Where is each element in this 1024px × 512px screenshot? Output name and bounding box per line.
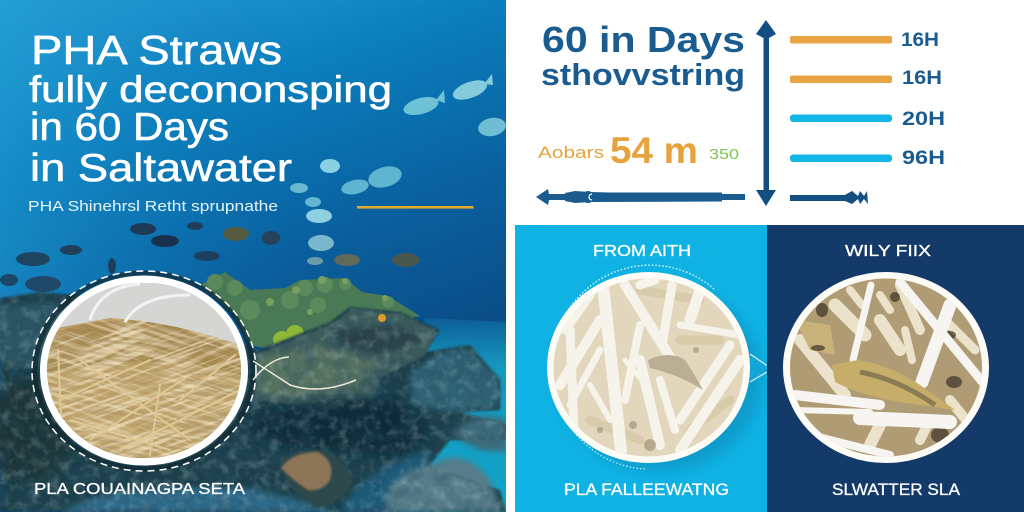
title: in Saltawater xyxy=(30,147,292,190)
title: PHA Straws xyxy=(31,27,282,73)
title: in 60 Days xyxy=(30,106,229,149)
stat row: 350 xyxy=(709,146,739,163)
straw photo xyxy=(550,276,746,460)
stat row xyxy=(538,130,739,171)
green coral xyxy=(200,272,420,350)
title: fully decononsping xyxy=(29,69,392,110)
heading: WILY FIIX xyxy=(845,243,932,260)
panel: PLA comparison xyxy=(515,225,772,512)
stat row: Aobars xyxy=(538,143,604,162)
seabed light water xyxy=(380,318,506,512)
bar values: 16H xyxy=(902,68,942,89)
bar values: 96H xyxy=(902,148,945,169)
label: SLWATTER SLA xyxy=(832,480,961,499)
accent line xyxy=(357,206,474,209)
fish school xyxy=(0,74,507,292)
dotted ring xyxy=(551,265,714,469)
bar values: 20H xyxy=(902,109,945,130)
orange coral xyxy=(378,314,386,322)
reef xyxy=(0,285,506,512)
right arrow xyxy=(790,191,868,204)
vertical double arrow xyxy=(756,20,776,206)
subtitle: PHA Shinehrsl Retht sprupnathe xyxy=(28,199,278,215)
stat row: 54 m xyxy=(610,130,698,171)
degraded straw photo xyxy=(786,276,986,460)
connector arrow xyxy=(750,354,772,382)
heading: FROM AITH xyxy=(593,243,691,260)
shadow xyxy=(559,285,761,471)
heading xyxy=(541,19,745,92)
panel: saltwater comparison xyxy=(767,225,1024,512)
label: PLA left: PLA COUAINAGPA SETA xyxy=(34,481,245,498)
bar values xyxy=(901,30,945,169)
heading: sthovvstring xyxy=(541,57,745,92)
callout: PLA straw circle xyxy=(31,270,356,472)
brown coral xyxy=(279,450,353,508)
panel: ocean scene xyxy=(0,0,507,512)
heading: 60 in Days xyxy=(542,19,745,60)
label: PLA FALLEEWATNG xyxy=(564,480,729,499)
left arrow xyxy=(536,189,745,205)
bar values: 16H xyxy=(901,30,939,51)
title xyxy=(29,35,390,182)
bars xyxy=(790,36,892,162)
panel: timeline xyxy=(536,19,945,206)
